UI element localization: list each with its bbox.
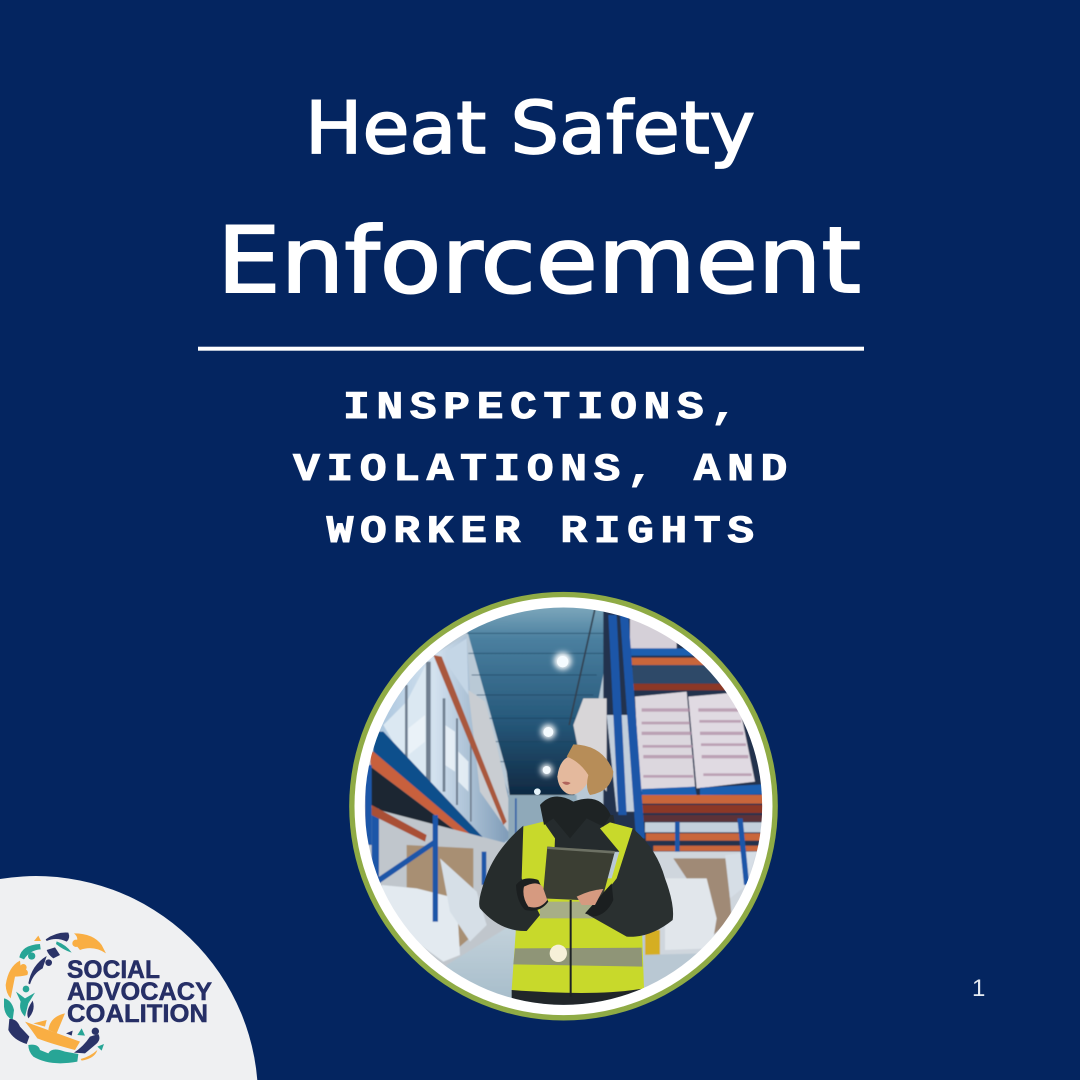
title: heat safety enforcement: Heat Safety xyxy=(305,86,755,170)
subtitle: WORKER RIGHTS xyxy=(326,510,761,554)
circular photo: warehouse inspector xyxy=(349,592,778,1020)
inspector figure xyxy=(479,744,673,1015)
logo wordmark: COALITION xyxy=(67,1000,208,1028)
subtitle: INSPECTIONS, xyxy=(343,386,744,430)
subtitle xyxy=(293,386,794,554)
logo panel xyxy=(0,876,257,1080)
divider line xyxy=(198,347,864,351)
logo mark xyxy=(4,933,106,1063)
logo wordmark xyxy=(67,956,212,1028)
page number: 1 xyxy=(972,975,985,1002)
title: heat safety enforcement xyxy=(217,86,861,314)
subtitle: VIOLATIONS, AND xyxy=(293,448,794,492)
logo wordmark: SOCIAL xyxy=(67,956,160,984)
ceiling lights xyxy=(534,652,571,795)
logo wordmark: ADVOCACY xyxy=(67,978,212,1006)
title: heat safety enforcement: Enforcement xyxy=(217,209,861,314)
